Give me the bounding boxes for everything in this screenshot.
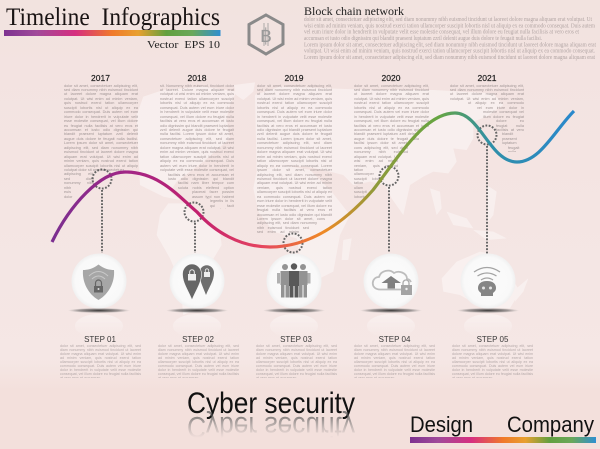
year labels: 2018 <box>188 73 207 83</box>
company brand block: Company <box>507 412 594 437</box>
curve line <box>52 111 574 247</box>
icon: bitcoin hexagon: ฿ <box>260 26 272 47</box>
step labels: STEP 03 <box>280 335 312 344</box>
top text block: block chain network: Block chain network <box>304 6 404 18</box>
heading: cyber security with reflection: Cyber security <box>187 387 355 420</box>
year labels: 2020 <box>382 73 401 83</box>
year labels <box>91 73 497 83</box>
text column: 2020 <box>354 84 429 199</box>
title <box>4 4 221 51</box>
year labels: 2021 <box>478 73 497 83</box>
title: Timeline Infographics <box>6 4 220 31</box>
top text block: block chain network <box>304 6 596 61</box>
year labels: 2017 <box>91 73 110 83</box>
step labels: STEP 02 <box>182 335 214 344</box>
step labels: STEP 05 <box>477 335 509 344</box>
step labels: STEP 04 <box>379 335 411 344</box>
heading: cyber security with reflection: Cyber security <box>187 410 355 443</box>
world map <box>137 82 528 315</box>
step labels: STEP 01 <box>84 335 116 344</box>
text column: 2021 <box>450 84 524 152</box>
year labels: 2019 <box>285 73 304 83</box>
top text block: block chain network: accumsan et iusto odio dignissim qui blandit praesent luptatum zzril delenit augue duis dolore te feugait nulla facilisi. <box>304 35 542 42</box>
dotted markers <box>92 126 496 256</box>
title: Vector EPS 10 <box>147 39 221 51</box>
company brand block: Design <box>410 412 473 437</box>
icon: bitcoin hexagon <box>248 13 284 56</box>
